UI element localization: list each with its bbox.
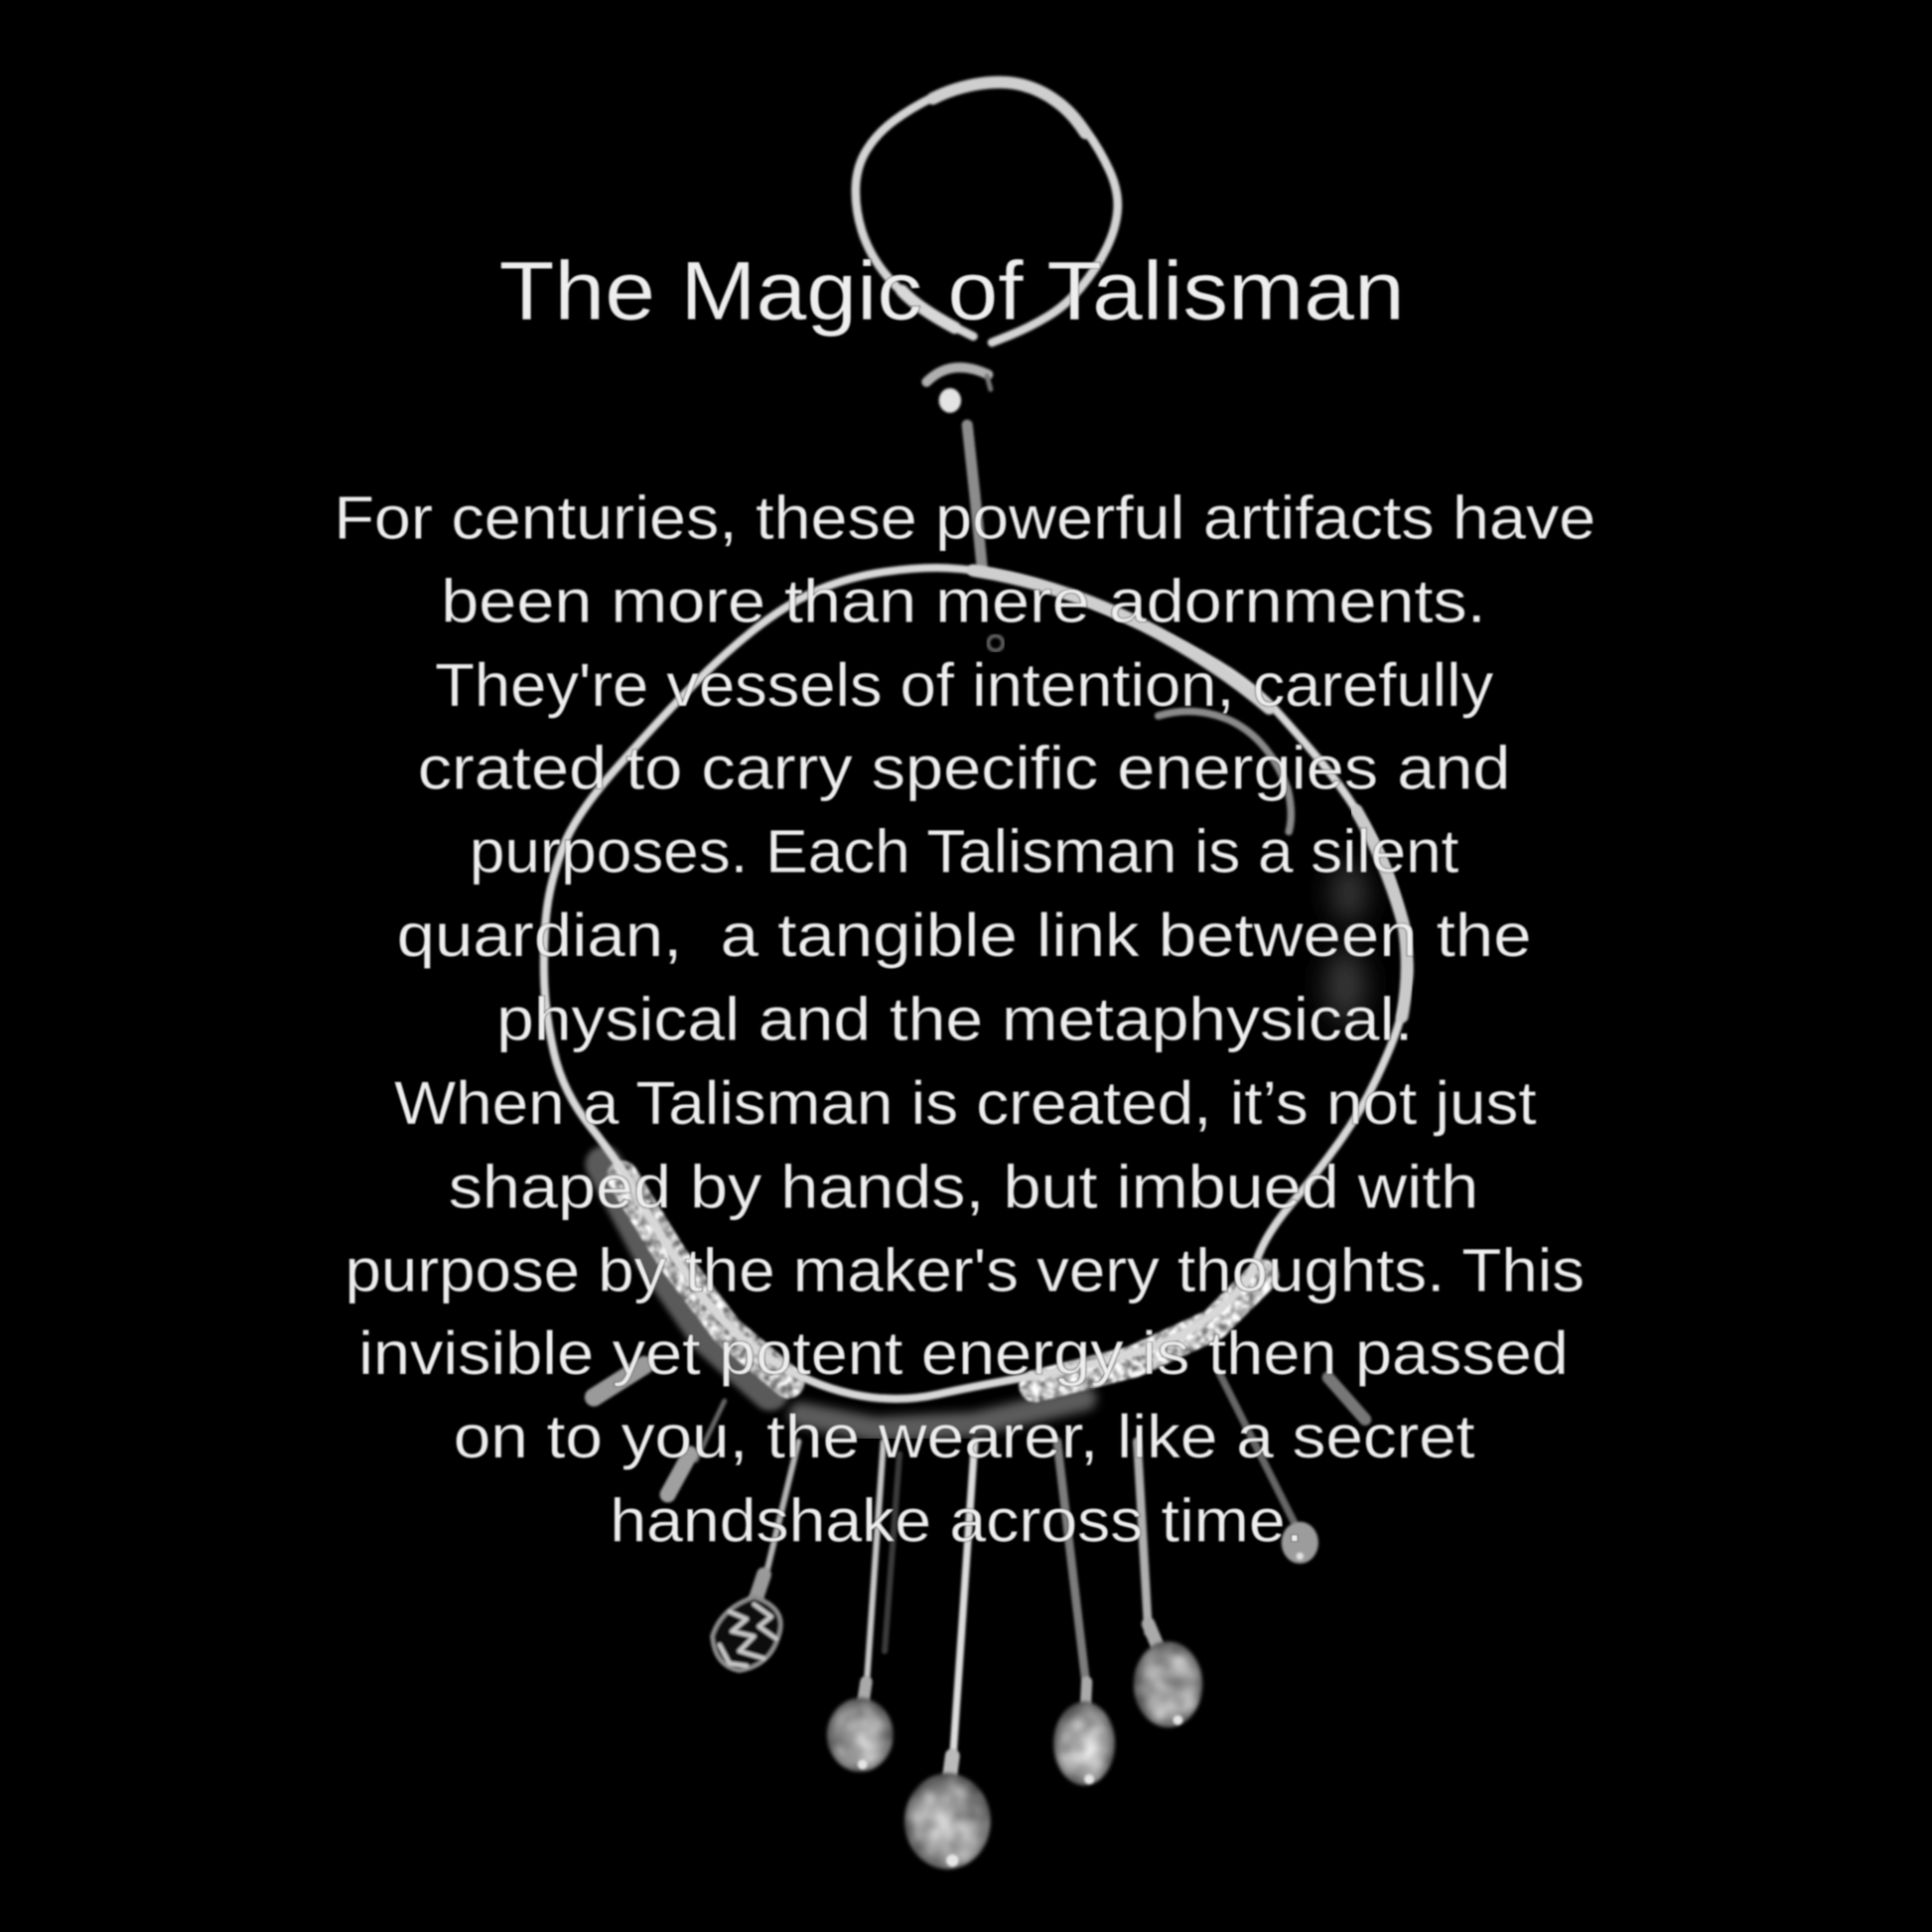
bead 4 [1053,1702,1115,1785]
body text [334,483,1595,1555]
talisman pendant illustration [544,81,1410,1869]
body text: quardian, a tangible link between the [397,901,1532,969]
beads [712,1522,1318,1869]
bead 3 [904,1773,991,1869]
body text: been more than mere adornments. [441,568,1486,635]
body text: purposes. Each Talisman is a silent [470,818,1459,886]
small ring detail [988,635,1003,650]
hanging rods [594,1365,1365,1784]
knot bead and stem [926,367,991,567]
body text: When a Talisman is created, it’s not just [394,1069,1537,1137]
body text: handshake across time. [610,1487,1304,1555]
body text: For centuries, these powerful artifacts have [334,483,1595,551]
title: The Magic of Talisman [499,244,1405,337]
bead 2 [827,1698,894,1772]
body text: shaped by hands, but imbued with [449,1153,1478,1220]
bead highlights [858,1553,1304,1866]
bead 5 [1134,1641,1202,1727]
body text: purpose by the maker's very thoughts. This [345,1237,1585,1305]
large hoop [544,568,1410,1430]
body text: physical and the metaphysical. [496,985,1414,1052]
body text: on to you, the wearer, like a secret [454,1403,1475,1470]
faint reflection on right of ring [1325,864,1366,1023]
bead 6 [1282,1522,1318,1564]
body text: crated to carry specific energies and [418,734,1511,801]
body text: invisible yet potent energy is then passed [358,1319,1569,1387]
top hanging loop [856,81,1118,343]
textured bead [712,1596,781,1671]
body text: They're vessels of intention, carefully [435,651,1494,719]
inner curved arc [1159,711,1291,832]
